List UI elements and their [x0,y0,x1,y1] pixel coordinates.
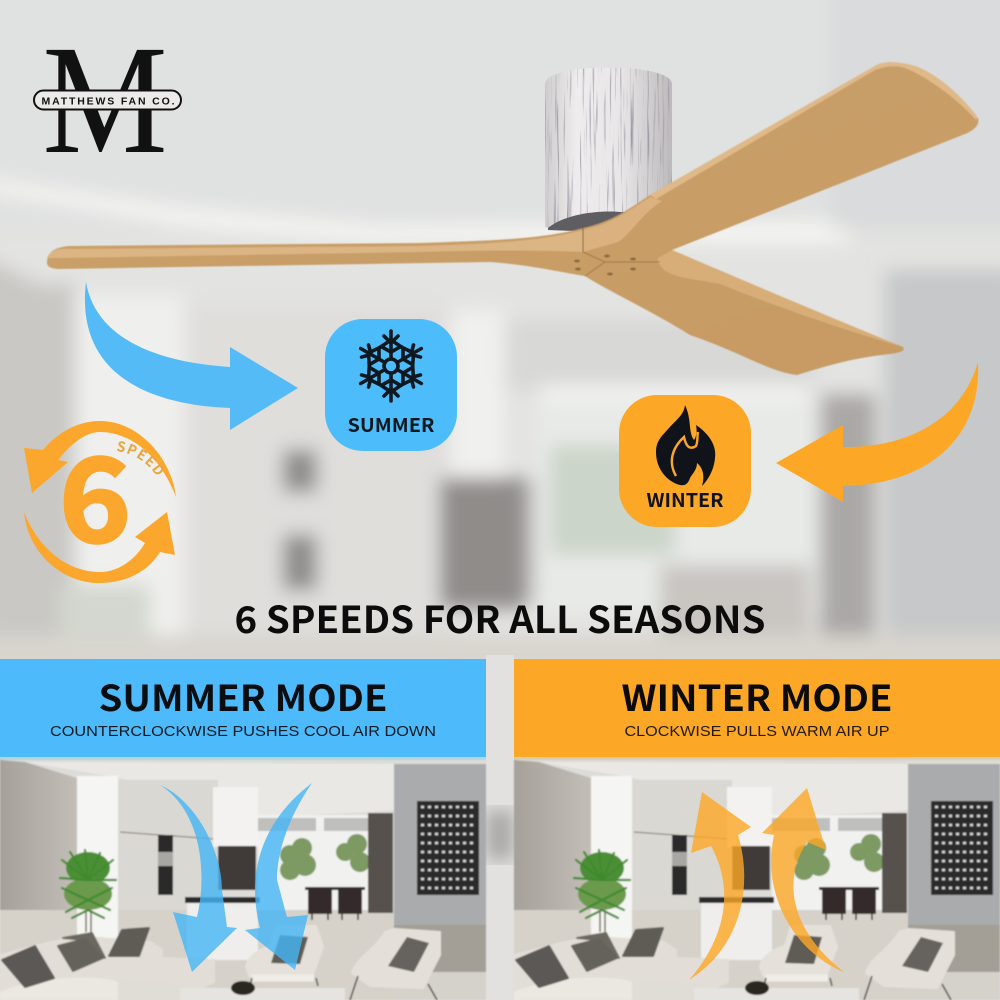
arrow: blue airflow to summer [85,282,298,430]
icon: 6 speed badge [24,408,176,583]
photo: summer room with cool air arrows [0,757,486,1000]
label: winter: WINTER [646,486,724,513]
icon: summer badge [325,319,457,451]
icon: 6 speed badge: SPEED [116,441,164,474]
icon: flame [656,405,715,486]
label: summer: SUMMER [348,411,435,438]
icon: snowflake [355,331,427,401]
panel: winter mode [514,659,1000,757]
heading: 6 SPEEDS FOR ALL SEASONS [234,590,766,644]
panel: summer mode [0,659,486,757]
icon: winter badge [619,395,751,527]
winter subheading: CLOCKWISE PULLS WARM AIR UP [624,723,890,740]
winter heading: WINTER MODE [622,670,892,722]
arrow: warm air left [689,792,751,980]
logo: Matthews Fan Co.: MATTHEWS FAN CO. [42,96,175,108]
summer heading: SUMMER MODE [98,670,388,722]
fan blades [47,62,978,375]
fan [47,62,978,375]
logo: Matthews Fan Co.: M [42,13,168,186]
arrow: orange airflow to winter [776,362,978,502]
photo: winter room with warm air arrows [514,757,1000,1000]
arrow: warm air right [762,788,844,972]
arrow: cool air right [245,783,312,970]
arrow: cool air left [160,785,237,972]
icon: 6 speed badge: 6 [59,408,131,576]
fan canopy [545,65,672,235]
summer subheading: COUNTERCLOCKWISE PUSHES COOL AIR DOWN [50,723,436,740]
